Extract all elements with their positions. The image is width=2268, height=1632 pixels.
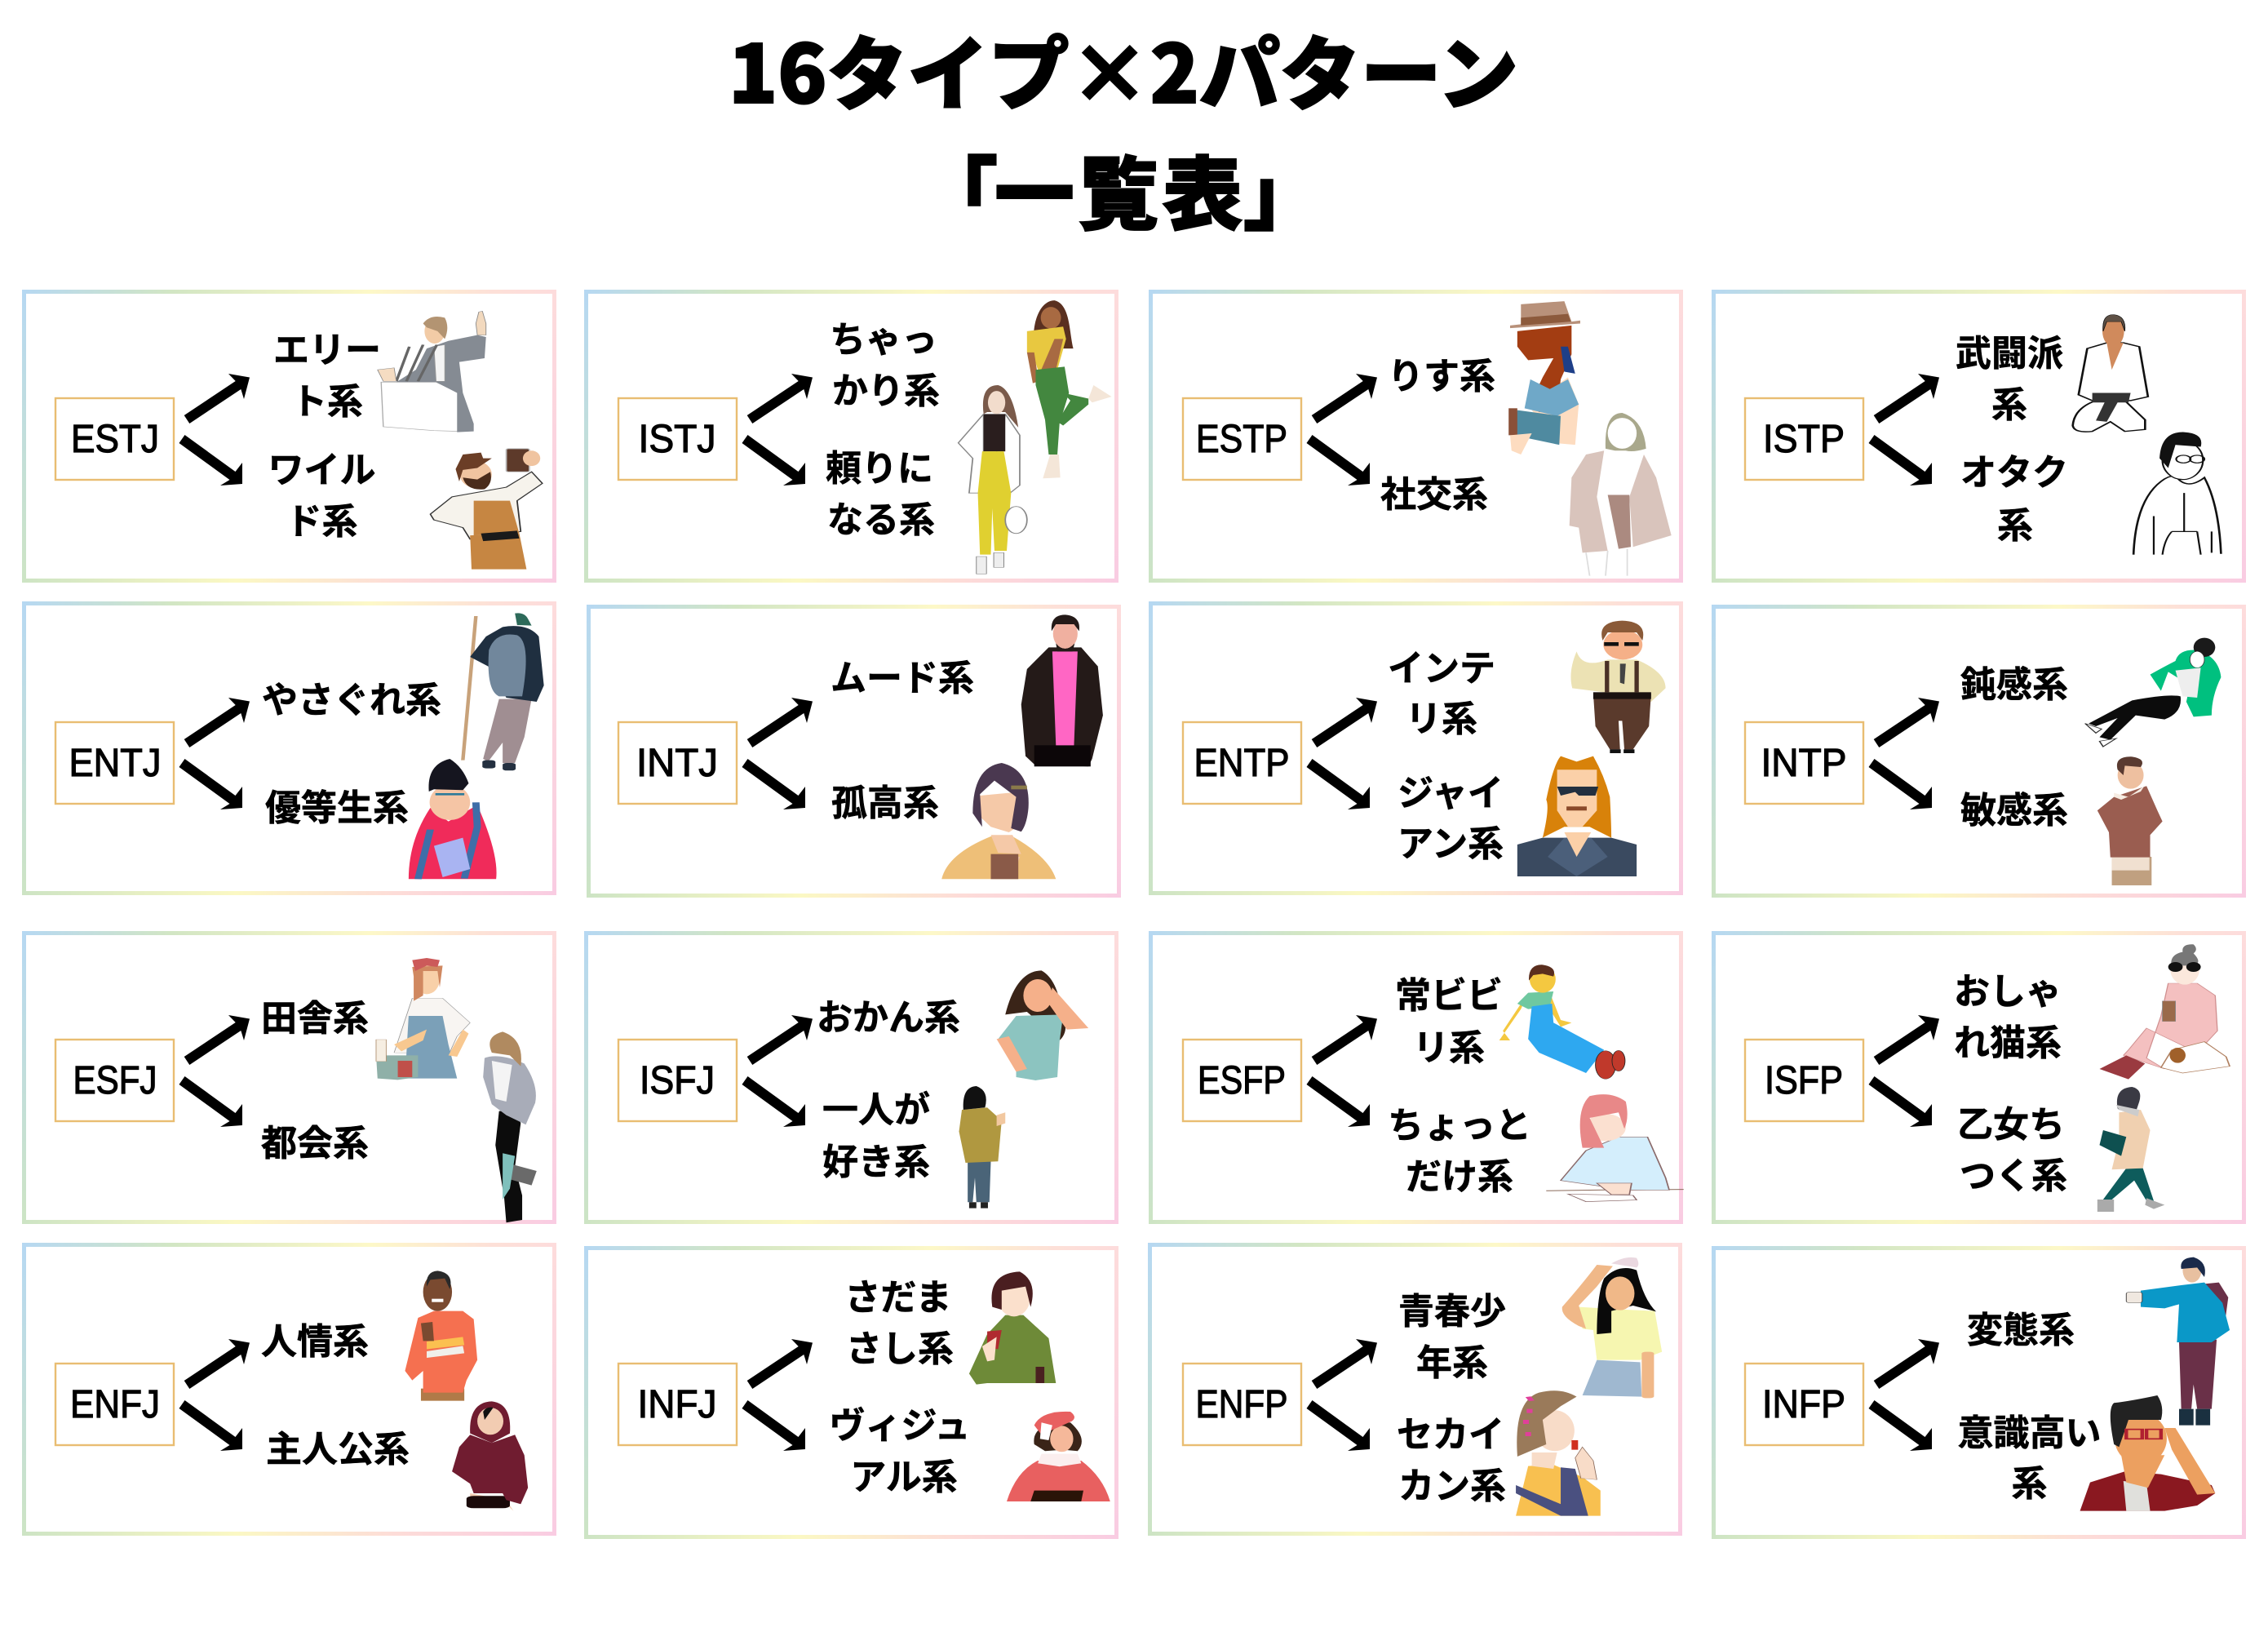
type label: INTJ: INTJ (636, 742, 718, 785)
arrow down (1307, 1400, 1370, 1451)
arrow down (742, 1076, 805, 1127)
panel: INFP (1712, 1246, 2246, 1539)
icon: man in black coat with pink scarf (1021, 614, 1103, 766)
arrow up (747, 374, 813, 424)
text: オタク系: 系 (1997, 496, 2033, 548)
panel frame (22, 601, 556, 895)
text: 敏感系: 敏感系 (1960, 781, 2068, 833)
panel: ISTJ (584, 290, 1118, 583)
type label: ISFP: ISFP (1765, 1059, 1843, 1102)
arrow down (179, 435, 242, 486)
text: おしゃれ猫系: れ猫系 (1954, 1013, 2062, 1066)
type label: ISFJ (618, 1040, 737, 1121)
text: 乙女ちつく系: つく系 (1960, 1146, 2067, 1199)
panel: ENTJ (22, 601, 556, 895)
arrow up (184, 698, 250, 747)
text: 頼りになる系: なる系 (827, 490, 935, 543)
panel frame (22, 290, 556, 583)
arrow down (1868, 1076, 1932, 1127)
arrow down (742, 1400, 805, 1451)
type label: ESTP: ESTP (1196, 418, 1287, 461)
icon: woman in beige coat (1570, 413, 1672, 576)
panel frame (1149, 931, 1683, 1224)
icon: big man with sunglasses (1517, 756, 1637, 876)
arrow up (184, 1339, 250, 1389)
arrow down (1307, 759, 1370, 809)
icon: smiling man in orange sweater (405, 1271, 477, 1401)
arrow up (747, 698, 813, 747)
text: 優等生系: 優等生系 (265, 778, 409, 831)
text: オタク系: オタク (1960, 443, 2068, 495)
type label: ISFP (1745, 1040, 1863, 1121)
icon: woman in pink sweats with dog (2099, 944, 2230, 1080)
icon: girl applying lipstick (1516, 1390, 1601, 1516)
type label: INTP (1745, 722, 1863, 804)
panel frame (1149, 601, 1683, 895)
arrow up (747, 1339, 813, 1389)
panel: ESTJ (22, 290, 556, 583)
icon: man thinking in brown sweater (2097, 756, 2163, 885)
text: ヴィジュアル系: アル系 (850, 1448, 958, 1500)
text: ヴィジュアル系: ヴィジュ (830, 1396, 970, 1448)
text: ジャイアン系: アン系 (1398, 814, 1504, 867)
panel frame (1712, 931, 2246, 1224)
panel: INTJ (587, 605, 1121, 898)
text: さだまさし系: さだま (844, 1268, 952, 1320)
text: 青春少年系: 青春少 (1398, 1282, 1506, 1334)
arrow up (184, 374, 250, 424)
text: おしゃれ猫系: おしゃ (1954, 962, 2062, 1014)
icon: man adjusting red glasses (2080, 1395, 2215, 1511)
type label: ESFP (1183, 1040, 1301, 1121)
arrow down (742, 759, 805, 809)
text: 一人が好き系: 好き系 (822, 1133, 930, 1185)
panel: INFJ (584, 1246, 1118, 1539)
type label: ESFJ (55, 1040, 174, 1121)
type label: ISFJ: ISFJ (640, 1059, 715, 1102)
panel frame (1712, 1246, 2246, 1539)
arrow down (179, 759, 242, 809)
panel: ESTP (1149, 290, 1683, 583)
type label: INTP: INTP (1761, 742, 1847, 785)
icon: city woman (483, 1031, 537, 1222)
arrow up (747, 1015, 813, 1065)
text: 人情系: 人情系 (261, 1312, 369, 1364)
text: 青春少年系: 年系 (1416, 1333, 1488, 1386)
type label: ISTJ (618, 398, 737, 480)
arrow down (742, 435, 805, 486)
type label: ESTP (1183, 398, 1301, 480)
type label: ISTP (1745, 398, 1863, 480)
icon: man pointing in blue jacket (2126, 1257, 2230, 1426)
icon: woman texting (2097, 1087, 2164, 1212)
arrow down (1868, 759, 1932, 809)
icon: judo man (2073, 315, 2148, 432)
text: 頼りになる系: 頼りに (826, 439, 933, 491)
panel: ENTP (1149, 601, 1683, 895)
type label: ENTP: ENTP (1194, 742, 1289, 785)
arrow down (179, 1400, 242, 1451)
icon: hiker (463, 613, 544, 770)
panel frame (1148, 1243, 1682, 1536)
text: 武闘派系: 武闘派 (1956, 324, 2063, 376)
type label: ENFP (1183, 1364, 1301, 1445)
text: 都会系: 都会系 (261, 1114, 369, 1166)
arrow down (1868, 1400, 1932, 1451)
icon: woman in white coat (959, 385, 1027, 574)
text: エリート系: エリー (273, 321, 381, 373)
type label: INFP (1745, 1364, 1863, 1445)
icon: woman in yellow top (1027, 300, 1112, 478)
type label: ESFP: ESFP (1198, 1059, 1286, 1102)
panel: ESFP (1149, 931, 1684, 1224)
panel: ISFP (1712, 931, 2246, 1224)
text: ワイルド系: ド系 (286, 492, 357, 544)
icon: country woman with bucket (376, 958, 470, 1080)
icon: nerd with suspenders (1570, 621, 1666, 753)
icon: person lying back with green cardigan (2085, 638, 2221, 747)
type label: ENTP (1183, 722, 1301, 804)
panel: ESFJ (22, 931, 556, 1224)
text: 乙女ちつく系: 乙女ち (1957, 1095, 2065, 1147)
icon: mom with glasses (997, 970, 1088, 1080)
arrow down (1307, 435, 1370, 486)
panel frame (584, 1246, 1118, 1539)
panel frame (1712, 605, 2246, 898)
text: 社交系: 社交系 (1380, 465, 1488, 517)
text: インテリ系: リ系 (1406, 690, 1477, 742)
arrow up (1312, 698, 1377, 747)
arrow up (1874, 698, 1939, 747)
type label: ISTP: ISTP (1763, 418, 1845, 461)
text: ちょっとだけ系: だけ系 (1406, 1147, 1513, 1200)
text: セカイカン系: カン系 (1398, 1457, 1506, 1509)
title (729, 11, 1518, 246)
icon: otaku with hoodie (2133, 432, 2221, 555)
type label: ESTJ: ESTJ (71, 418, 159, 461)
text: 常ビビリ系: リ系 (1413, 1018, 1485, 1071)
text: 一人が好き系: 一人が (822, 1080, 930, 1133)
type label: ESTJ (55, 398, 174, 480)
text: 変態系: 変態系 (1967, 1301, 2075, 1353)
text: ちょっとだけ系: ちょっと (1388, 1096, 1531, 1148)
icon: hoodie hero (452, 1401, 528, 1511)
panel: INTP (1712, 605, 2246, 898)
text: 武闘派系: 系 (1991, 375, 2027, 428)
type label: ENTJ: ENTJ (69, 742, 162, 785)
text: りす系: りす系 (1388, 347, 1495, 399)
icon: wild man with beer (430, 449, 543, 570)
text: インテリ系: インテ (1388, 639, 1495, 691)
text: やさぐれ系: やさぐれ系 (262, 671, 441, 723)
type label: ESFJ: ESFJ (73, 1059, 157, 1102)
icon: girl with hat and yellow top (1562, 1257, 1662, 1398)
icon: honor student (409, 759, 497, 879)
icon: man at podium (378, 311, 486, 432)
text: ちゃっかり系: かり系 (832, 361, 940, 414)
icon: scared girl in overalls (1499, 965, 1625, 1079)
panel frame (584, 931, 1118, 1224)
arrow up (1874, 1339, 1939, 1389)
arrow down (179, 1076, 242, 1127)
text: 意識高い系: 系 (2012, 1454, 2048, 1506)
panel frame (584, 290, 1118, 583)
arrow up (1874, 1015, 1939, 1065)
text: 主人公系: 主人公系 (266, 1420, 410, 1472)
text: さだまさし系: さし系 (846, 1319, 954, 1372)
text: ムード系: ムード系 (831, 649, 974, 701)
text: 常ビビリ系: 常ビビ (1395, 966, 1503, 1018)
type label: INFP: INFP (1762, 1383, 1845, 1426)
type label: INFJ: INFJ (638, 1383, 716, 1426)
arrow up (1874, 374, 1939, 424)
type label: ISTJ: ISTJ (638, 418, 716, 461)
arrow up (1312, 1339, 1377, 1389)
text: エリート系: ト系 (291, 372, 363, 424)
panel frame (1712, 290, 2246, 583)
text: 意識高い系: 意識高い (1958, 1404, 2102, 1456)
type label: INFJ (618, 1364, 737, 1445)
arrow up (184, 1015, 250, 1065)
panel frame (22, 1243, 556, 1536)
type label: ENFP: ENFP (1196, 1383, 1287, 1426)
type label: INTJ (618, 722, 737, 804)
panel: ISFJ (584, 931, 1118, 1224)
icon: woman with hat and book (1508, 301, 1580, 455)
text: おかん系: おかん系 (817, 988, 960, 1040)
text: 孤高系: 孤高系 (831, 774, 939, 826)
type label: ENFJ: ENFJ (70, 1383, 160, 1426)
icon: man with long hair (941, 763, 1056, 879)
panel: ENFP (1148, 1243, 1682, 1536)
icon: woman from behind (959, 1086, 1005, 1208)
icon: woman with beret (1007, 1412, 1110, 1501)
text: 田舎系: 田舎系 (261, 989, 369, 1041)
panel frame (587, 605, 1121, 898)
text: ちゃっかり系: ちゃっ (830, 310, 937, 362)
type label: ENFJ (55, 1364, 174, 1445)
arrow up (1312, 1015, 1377, 1065)
text: ジャイアン系: ジャイ (1398, 764, 1504, 816)
icon: woman in green sweater (969, 1271, 1056, 1385)
title: 「一覧表」 (918, 131, 1323, 246)
text: ワイルド系: ワイル (268, 441, 375, 493)
icon: pink-haired woman writing (1546, 1094, 1684, 1202)
text: セカイカン系: セカイ (1397, 1405, 1504, 1457)
title: 16タイプ×2パターン (729, 11, 1518, 126)
arrow up (1312, 374, 1377, 424)
panel frame (22, 931, 556, 1224)
arrow down (1307, 1076, 1370, 1127)
panel: ISTP (1712, 290, 2246, 583)
type label: ENTJ (55, 722, 174, 804)
arrow down (1868, 435, 1932, 486)
text: 鈍感系: 鈍感系 (1960, 655, 2068, 707)
panel: ENFJ (22, 1243, 556, 1536)
panel frame (1149, 290, 1683, 583)
